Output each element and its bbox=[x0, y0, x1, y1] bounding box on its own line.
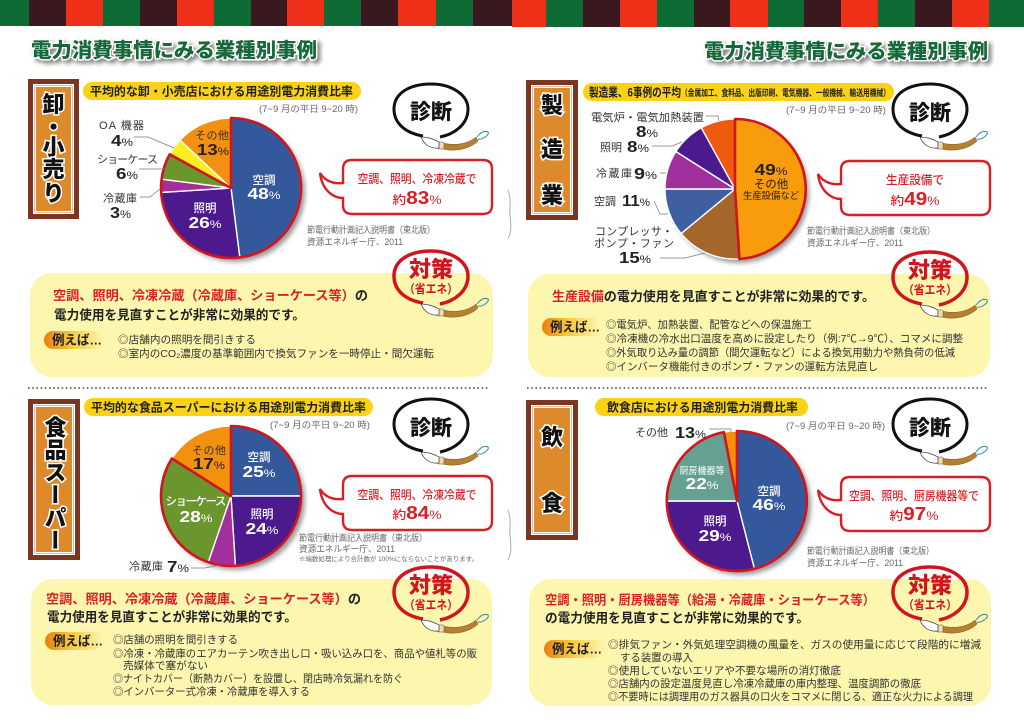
pie chart: food supermarket bbox=[161, 426, 305, 570]
sign: 卸・小売り: ・ bbox=[42, 115, 65, 140]
measures panel text bbox=[545, 592, 875, 626]
badge: diagnosis bbox=[893, 84, 987, 150]
sign: 食品スーパー: 食品スーパー bbox=[42, 416, 66, 552]
pie label: other bbox=[635, 425, 731, 442]
badge: diagnosis: 診断 bbox=[909, 102, 951, 125]
badge: measures: （省エネ） bbox=[404, 281, 458, 296]
badge: measures: 対策 bbox=[409, 573, 453, 598]
pie chart: restaurants: 22 % bbox=[686, 476, 719, 493]
pie chart: food supermarket: 空調 bbox=[248, 450, 270, 464]
callout: 97%: 約97% bbox=[890, 504, 939, 524]
callout: 83% bbox=[320, 160, 492, 214]
pie chart: food supermarket: 28 % bbox=[180, 509, 213, 526]
top stripe band bbox=[0, 0, 1024, 27]
pie label: other: 13% bbox=[675, 425, 706, 442]
callout: 83%: 空調、照明、冷凍冷蔵で bbox=[358, 171, 476, 186]
badge: measures: （省エネ） bbox=[903, 597, 957, 612]
chart heading pill bbox=[583, 83, 894, 101]
examples list: ◎冷凍・冷蔵庫のエアカーテン吹き出し口・吸い込み口を、商品や値札等の販 bbox=[113, 647, 477, 660]
source note: 節電行動計画記入説明書（東北版） bbox=[807, 545, 934, 556]
yellow panels backgrounds bbox=[30, 273, 991, 706]
badge: measures: 対策 bbox=[409, 257, 453, 282]
time note: (7~9 月の平日 9~20 時) bbox=[270, 420, 370, 430]
callout: 84% bbox=[320, 476, 492, 530]
time note: (7~9 月の平日 9~20 時) bbox=[786, 105, 886, 115]
title left: 電力消費事情にみる業種別事例 bbox=[31, 38, 317, 62]
pie chart: restaurants: 厨房機器等 bbox=[680, 465, 725, 477]
pie labels: 冷蔵庫 bbox=[103, 191, 137, 205]
pie chart: food supermarket: 17 % bbox=[193, 456, 225, 473]
source note: 資源エネルギー庁、2011 bbox=[807, 237, 903, 248]
source note: 節電行動計画記入説明書（東北版） bbox=[307, 224, 435, 235]
example pill bbox=[542, 318, 600, 336]
badge: measures bbox=[394, 251, 488, 317]
pie chart: manufacturing bbox=[665, 119, 809, 263]
badge: diagnosis: 診断 bbox=[410, 101, 452, 124]
chart heading pill: 平均的な食品スーパーにおける用途別電力消費比率 bbox=[91, 400, 366, 414]
measures panel text: 電力使用を見直すことが非常に効果的です。 bbox=[47, 610, 297, 624]
measures panel text: 電力使用を見直すことが非常に効果的です。 bbox=[54, 308, 305, 322]
sign: 製造業: 製 bbox=[541, 93, 563, 118]
pie label: refrigerator bbox=[129, 559, 220, 576]
example pill bbox=[45, 632, 103, 650]
examples list: ◎排気ファン・外気処理空調機の風量を、ガスの使用量に応じて段階的に増減 bbox=[608, 638, 982, 651]
measures panel text: の電力使用を見直すことが非常に効果的です。 bbox=[545, 610, 809, 626]
example pill: 例えば… bbox=[552, 642, 602, 656]
pie label: refrigerator: 7% bbox=[167, 559, 189, 576]
source note: 資源エネルギー庁、2011 bbox=[299, 543, 395, 554]
pie labels: 照明 bbox=[600, 141, 622, 154]
pie labels: 8% bbox=[636, 124, 658, 141]
chart heading pill: 製造業、6事例の平均 bbox=[589, 84, 681, 100]
examples list: する装置の導入 bbox=[620, 651, 693, 664]
title right: 電力消費事情にみる業種別事例 bbox=[704, 39, 988, 63]
badge: measures: 対策 bbox=[908, 258, 952, 283]
pie labels: 6% bbox=[116, 166, 138, 183]
callout: 84%: 空調、照明、冷凍冷蔵で bbox=[358, 487, 476, 502]
pie label: other: その他 bbox=[635, 426, 668, 439]
sign: 卸・小売り: 小 bbox=[42, 135, 65, 160]
sign: 卸・小売り bbox=[28, 79, 79, 219]
pie chart: food supermarket: 25 % bbox=[242, 464, 276, 481]
pie chart: wholesale and retail: 照明 bbox=[194, 202, 216, 215]
callout: 49%: 生産設備で bbox=[886, 172, 944, 187]
pie chart: restaurants: 29 % bbox=[698, 528, 732, 545]
source note: 資源エネルギー庁、2011 bbox=[807, 557, 903, 568]
pie label: refrigerator: 冷蔵庫 bbox=[129, 559, 163, 573]
chart heading pill: （金属加工、食料品、出版印刷、電気機器、一般機械、輸送用機械） bbox=[681, 87, 890, 98]
pie chart: food supermarket: ショーケース bbox=[166, 495, 226, 508]
section: food supermarket bbox=[28, 398, 492, 698]
pie chart: restaurants: 照明 bbox=[704, 515, 726, 528]
pie labels: OA 機器 bbox=[99, 119, 144, 132]
badge: diagnosis bbox=[394, 399, 488, 465]
pie labels: 空調 bbox=[594, 195, 616, 208]
badge: diagnosis: 診断 bbox=[410, 417, 452, 440]
examples list: ◎店舗内の設定温度見直し冷凍冷蔵庫の庫内整理、温度調節の徹底 bbox=[608, 677, 921, 690]
example pill: 例えば… bbox=[52, 332, 102, 348]
pie labels: 9% bbox=[634, 166, 657, 183]
time note: (7~9 月の平日 9~20 時) bbox=[786, 421, 885, 431]
pie labels: ショーケース bbox=[97, 153, 158, 166]
measures panel text: 空調、照明、冷凍冷蔵（冷蔵庫、ショーケース等） の bbox=[53, 288, 368, 303]
badge: diagnosis bbox=[893, 399, 987, 465]
section: restaurants bbox=[526, 398, 990, 703]
pie labels: 15 % bbox=[619, 250, 651, 267]
sign: 飲食: 食 bbox=[541, 491, 563, 516]
examples list: ◎外気取り込み量の調節（間欠運転など）による換気用動力や熱負荷の低減 bbox=[606, 346, 955, 359]
pie chart: restaurants: 46 % bbox=[752, 497, 786, 514]
examples list: 売媒体で塞がない bbox=[123, 659, 208, 672]
pie labels: 電気炉・電気加熱装置 bbox=[591, 110, 704, 124]
sign: 製造業: 造 bbox=[541, 137, 563, 162]
badge: measures bbox=[893, 252, 987, 318]
pie labels: 8% bbox=[627, 139, 649, 156]
examples list: ◎不要時には調理用のガス器具の口火をコマメに閉じる、適正な火力による調理 bbox=[608, 690, 973, 703]
badge: measures bbox=[394, 567, 488, 633]
section: manufacturing bbox=[526, 80, 990, 373]
pie chart: manufacturing: 49 % bbox=[754, 162, 788, 179]
badge: measures bbox=[893, 567, 987, 633]
sign: 製造業: 業 bbox=[541, 183, 563, 208]
callout: 83%: 約83% bbox=[392, 188, 442, 208]
pie labels: ポンプ・ファン bbox=[594, 237, 674, 250]
time note: (7~9 月の平日 9~20 時) bbox=[259, 104, 358, 114]
source note: 節電行動計画記入説明書（東北版） bbox=[807, 225, 935, 236]
badge: diagnosis bbox=[394, 84, 488, 150]
measures panel text: 空調、照明、冷凍冷蔵（冷蔵庫、ショーケース等） の bbox=[46, 592, 361, 606]
pie chart: food supermarket: 照明 bbox=[250, 508, 274, 521]
callout: 49%: 約49% bbox=[890, 189, 940, 209]
examples list: ◎インバータ機能付きのポンプ・ファンの運転方法見直し bbox=[606, 360, 878, 373]
pie chart: wholesale and retail: その他 bbox=[195, 129, 229, 142]
pie chart: restaurants bbox=[667, 431, 811, 575]
measures panel text: 生産設備の電力使用を見直すことが非常に効果的です。 bbox=[552, 289, 875, 304]
pie labels: 冷蔵庫 bbox=[596, 166, 632, 180]
pie chart: wholesale and retail bbox=[161, 118, 305, 262]
chart heading pill: 飲食店における用途別電力消費比率 bbox=[607, 400, 798, 414]
pie chart: manufacturing: その他 bbox=[754, 178, 789, 191]
pie labels: 11% bbox=[622, 193, 650, 210]
pie labels bbox=[591, 110, 719, 267]
callout: 49% bbox=[818, 161, 990, 215]
callout: 84%: 約84% bbox=[392, 503, 442, 523]
pie chart: food supermarket: その他 bbox=[192, 444, 226, 457]
pie labels: 4% bbox=[111, 133, 133, 150]
measures panel text bbox=[46, 592, 361, 624]
examples list: ◎店舗の照明を間引きする bbox=[113, 633, 238, 646]
pie chart: manufacturing: 生産設備など bbox=[743, 190, 799, 202]
pie labels: 3% bbox=[110, 205, 131, 222]
badge: diagnosis: 診断 bbox=[909, 417, 951, 440]
sign: 飲食: 飲 bbox=[541, 425, 563, 450]
pie chart: food supermarket: 24 % bbox=[246, 521, 279, 538]
chart heading pill: 平均的な卸・小売店における用途別電力消費比率 bbox=[90, 84, 353, 98]
badge: measures: （省エネ） bbox=[903, 282, 957, 297]
examples list: ◎電気炉、加熱装置、配管などへの保温施工 bbox=[606, 318, 812, 331]
measures panel text: 空調・照明・厨房機器等（給湯・冷蔵庫・ショーケース等） bbox=[545, 592, 875, 608]
sign: 卸・小売り: 売 bbox=[42, 157, 65, 182]
examples list: ◎使用していないエリアや不要な場所の消灯徹底 bbox=[608, 664, 842, 677]
examples list: ◎室内のCO₂濃度の基準範囲内で換気ファンを一時停止・間欠運転 bbox=[118, 347, 434, 360]
source note: 資源エネルギー庁、2011 bbox=[307, 236, 403, 247]
examples list: ◎冷凍機の冷水出口温度を高めに設定したり（例:7℃→9℃）、コマメに調整 bbox=[606, 332, 963, 345]
measures panel text bbox=[53, 288, 368, 322]
sign: 食品スーパー bbox=[28, 399, 80, 560]
section: wholesale and retail bbox=[28, 79, 492, 360]
badge: measures: 対策 bbox=[908, 573, 952, 598]
examples list: ◎インバーター式冷凍・冷蔵庫を導入する bbox=[113, 685, 310, 698]
pie chart: restaurants: 空調 bbox=[758, 484, 780, 498]
examples list: ◎ナイトカバー（断熱カバー）を設置し、閉店時冷気漏れを防ぐ bbox=[113, 672, 403, 685]
sign: 飲食 bbox=[526, 400, 578, 540]
sign: 卸・小売り: り bbox=[42, 181, 65, 206]
pie chart: wholesale and retail: 空調 bbox=[252, 173, 276, 187]
pie chart: wholesale and retail: 26 % bbox=[188, 215, 222, 232]
sign: 製造業 bbox=[526, 80, 578, 220]
source note: 節電行動計画記入説明書（東北版） bbox=[299, 532, 427, 543]
pie chart: wholesale and retail: 13 % bbox=[197, 142, 229, 159]
examples list: ◎店舗内の照明を間引きする bbox=[118, 333, 256, 346]
sign: 卸・小売り: 卸 bbox=[42, 92, 65, 117]
pie labels: コンプレッサ・ bbox=[595, 225, 673, 238]
source note: ※端数処理により合計数が 100%にならないことがあります。 bbox=[299, 554, 478, 563]
pie labels bbox=[97, 119, 174, 222]
example pill: 例えば… bbox=[550, 320, 600, 334]
example pill: 例えば… bbox=[53, 634, 103, 648]
badge: measures: （省エネ） bbox=[404, 597, 458, 612]
callout: 97% bbox=[818, 477, 990, 531]
pie chart: wholesale and retail: 48 % bbox=[248, 186, 281, 203]
callout: 97%: 空調、照明、厨房機器等で bbox=[849, 488, 979, 503]
